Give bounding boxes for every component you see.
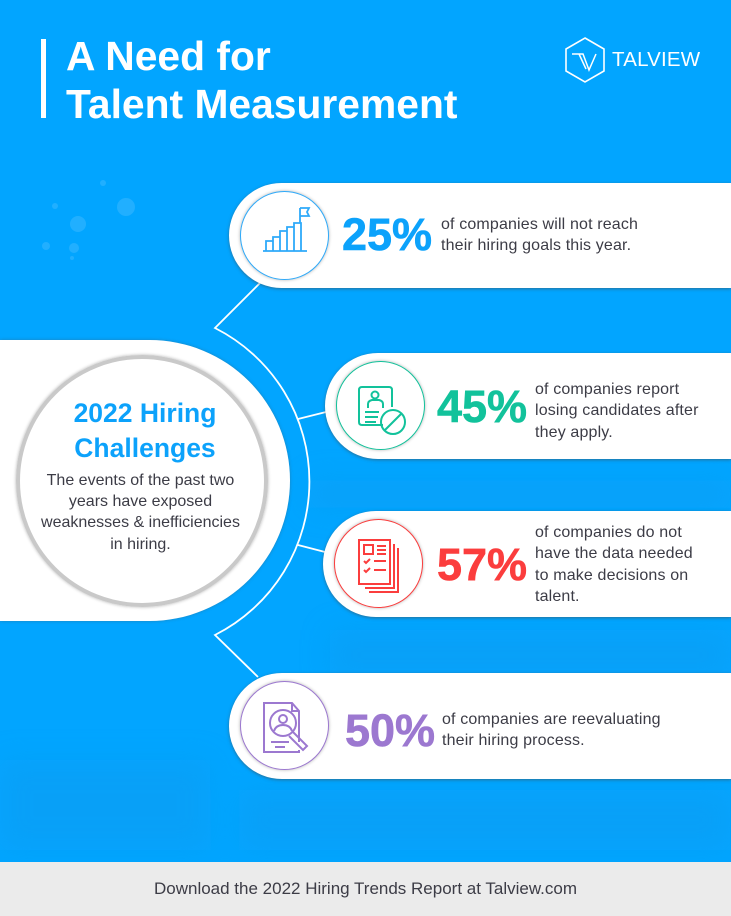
card: 25% xyxy=(229,183,731,288)
stat text: their hiring process. xyxy=(442,732,585,749)
stat text: talent. xyxy=(535,588,580,605)
title: Talent Measurement xyxy=(66,81,457,127)
panel text: years have exposed xyxy=(69,493,212,510)
logo wordmark: TALVIEW xyxy=(612,48,700,71)
stat: 50% xyxy=(345,705,435,756)
panel heading: Challenges xyxy=(74,432,216,462)
footer xyxy=(0,862,731,916)
icon: report checklist xyxy=(334,519,423,608)
title: A Need for xyxy=(66,33,271,79)
card: 50% xyxy=(229,673,731,779)
logo: Talview xyxy=(565,37,700,83)
icon: document with magnifier xyxy=(240,681,329,770)
stat text xyxy=(535,524,693,605)
stat text: have the data needed xyxy=(535,545,693,562)
card: 45% xyxy=(325,353,731,459)
panel heading xyxy=(74,398,216,462)
footer: Download the 2022 Hiring Trends Report at Talview.com xyxy=(154,879,577,898)
stat text xyxy=(535,381,699,441)
stat text: they apply. xyxy=(535,424,613,441)
stat text: to make decisions on xyxy=(535,567,688,584)
stat text xyxy=(442,711,661,749)
stat: 45% xyxy=(437,381,527,432)
inner circle xyxy=(16,355,268,607)
stat text: of companies are reevaluating xyxy=(442,711,661,728)
stat text: losing candidates after xyxy=(535,402,699,419)
stat: 25% xyxy=(342,209,432,260)
panel heading: 2022 Hiring xyxy=(74,398,216,428)
panel text: weaknesses & inefficiencies xyxy=(41,514,240,531)
stat: 57% xyxy=(437,539,527,590)
title xyxy=(66,33,457,127)
icon: bar chart with flag xyxy=(240,191,329,280)
panel text xyxy=(41,472,240,553)
icon: hexagon logo mark xyxy=(565,37,605,83)
title accent bar xyxy=(41,39,46,118)
card: 57% xyxy=(323,511,731,617)
stat text: of companies report xyxy=(535,381,679,398)
stat text: their hiring goals this year. xyxy=(441,237,631,254)
stat text: of companies will not reach xyxy=(441,216,638,233)
panel text: in hiring. xyxy=(110,536,171,553)
stat text: of companies do not xyxy=(535,524,682,541)
panel text: The events of the past two xyxy=(47,472,234,489)
panel: 2022 hiring challenges xyxy=(0,340,290,621)
icon: candidate profile blocked xyxy=(336,361,425,450)
stat text xyxy=(441,216,638,254)
